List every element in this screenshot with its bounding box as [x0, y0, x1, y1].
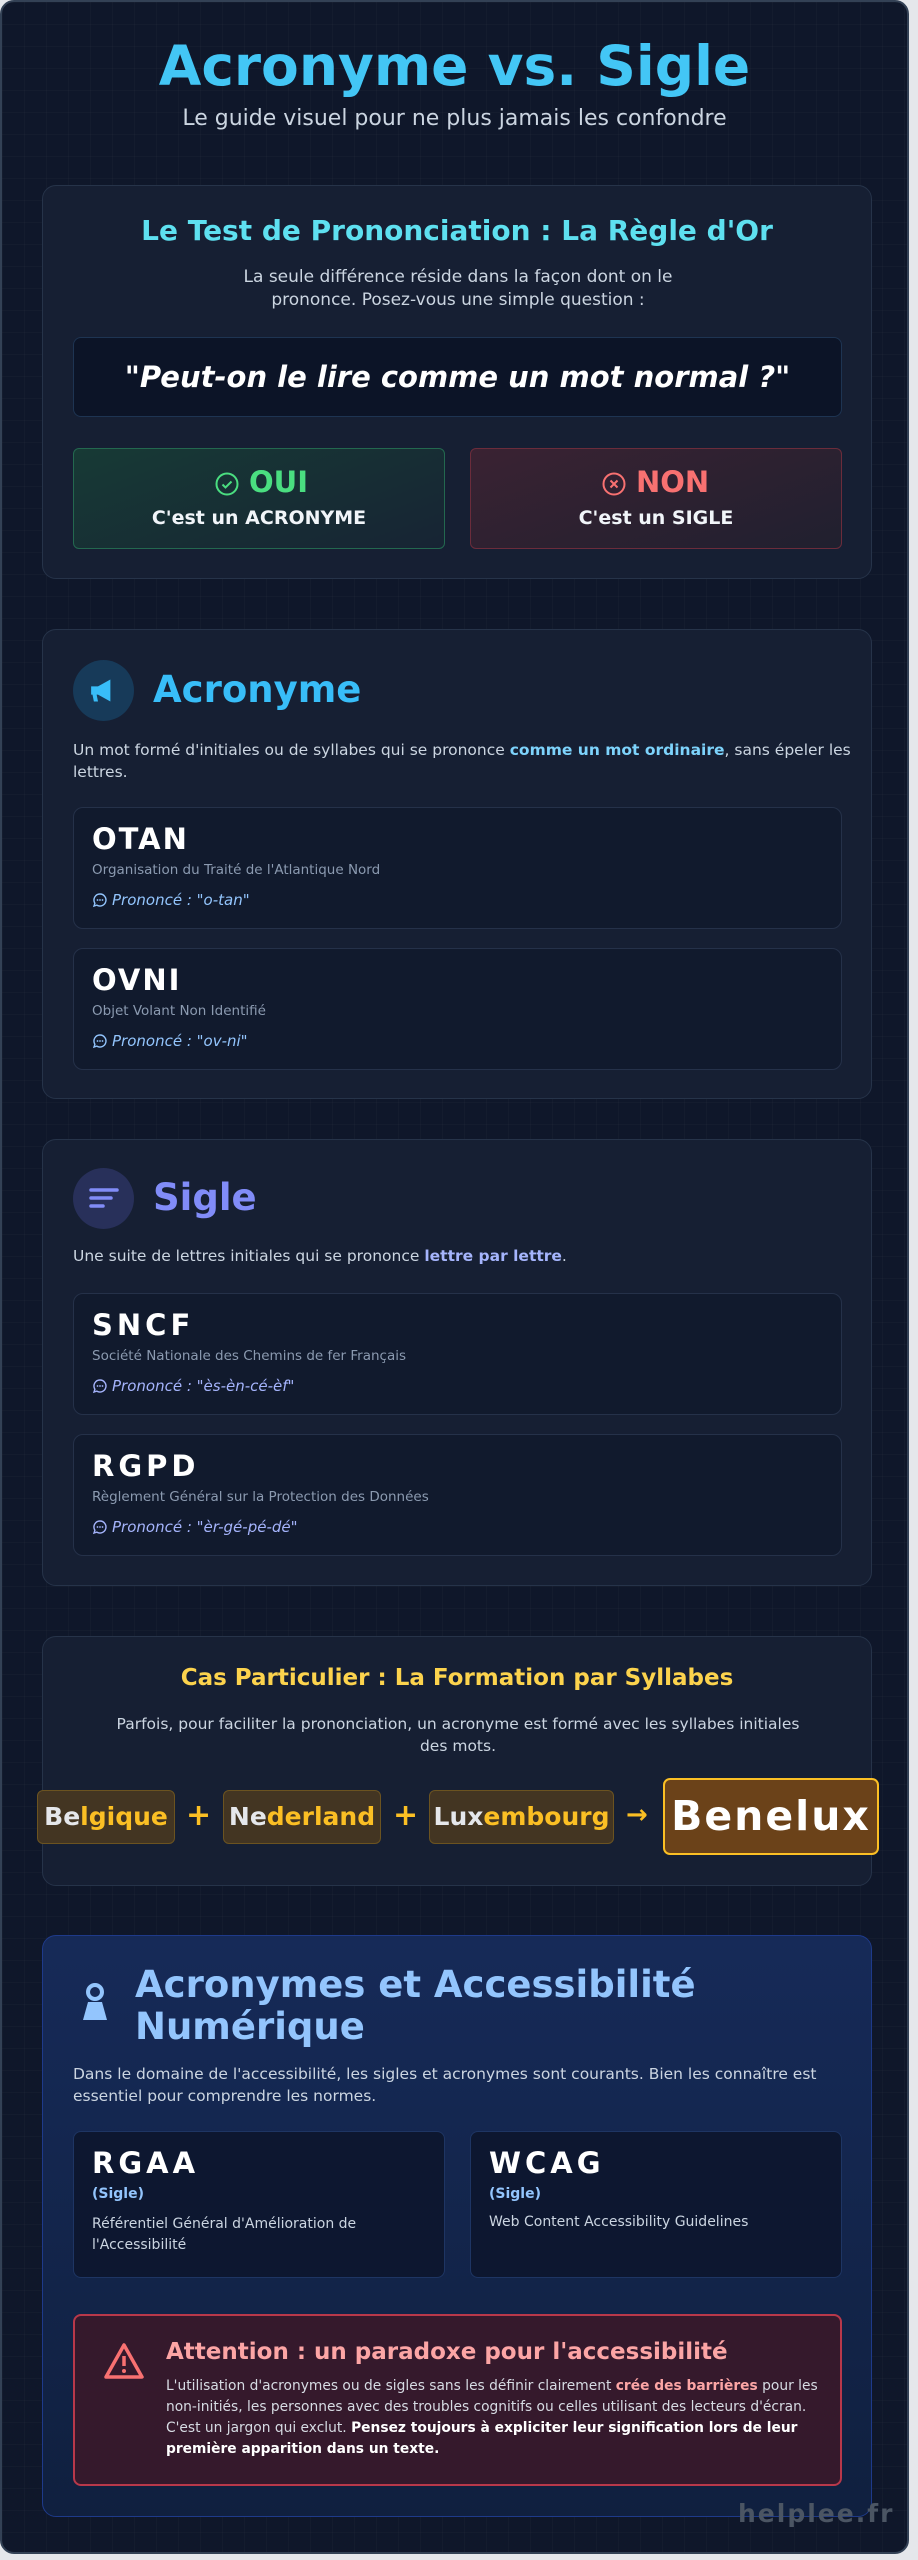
heading: Cas Particulier : La Formation par Syllabes	[181, 1665, 733, 1691]
card: RGAA	[73, 2131, 445, 2278]
card: RGAA: Référentiel Général d'Amélioration de l'Accessibilité	[92, 2216, 356, 2253]
icon: megaphone	[73, 660, 134, 721]
card: WCAG	[470, 2131, 842, 2278]
title: Acronyme vs. Sigle	[159, 34, 750, 98]
card: RGAA: (Sigle)	[92, 2186, 144, 2202]
card: OTAN	[73, 807, 842, 929]
icon: lines	[73, 1168, 134, 1229]
card: WCAG: WCAG	[489, 2146, 605, 2180]
formula: Benelux	[37, 1778, 879, 1855]
formula: Benelux: Belgique	[44, 1802, 168, 1831]
formula: Benelux: Benelux	[671, 1792, 871, 1840]
heading: Acronyme	[153, 668, 361, 711]
formula: Benelux: +	[186, 1798, 211, 1833]
panel: syllables	[42, 1636, 872, 1886]
card: WCAG: (Sigle)	[489, 2186, 541, 2202]
card: OTAN: OTAN	[92, 822, 189, 856]
box: NON: NON	[636, 465, 709, 499]
card: OTAN: Organisation du Traité de l'Atlantique Nord	[92, 862, 380, 878]
formula: Benelux: Nederland	[229, 1802, 375, 1831]
card: SNCF: SNCF	[92, 1308, 194, 1342]
watermark: helplee.fr	[738, 2499, 894, 2528]
callout: warning: L'utilisation d'acronymes ou de sigles sans les définir clairement crée des barrières pour les non-initiés, les personnes avec des troubles cognitifs ou celles utilisant des lecteurs d'écran. C'est un jargon qui exclut. Pensez toujours à expliciter leur signification lors de leur première apparition dans un texte.	[166, 2378, 818, 2457]
card: RGPD: Prononcé : "èr-gé-pé-dé"	[112, 1518, 298, 1536]
box: NON: C'est un SIGLE	[579, 507, 733, 529]
question box	[73, 337, 842, 417]
description: Une suite de lettres initiales qui se prononce lettre par lettre.	[73, 1247, 567, 1265]
box: OUI: OUI	[249, 465, 308, 499]
heading	[135, 1963, 696, 2048]
card: RGPD	[73, 1434, 842, 1556]
card: SNCF: Société Nationale des Chemins de fer Français	[92, 1348, 406, 1364]
heading: Sigle	[153, 1176, 257, 1219]
card: OVNI	[73, 948, 842, 1070]
card: OVNI: OVNI	[92, 963, 181, 997]
formula: Benelux: →	[626, 1800, 648, 1830]
box: OUI	[73, 448, 445, 549]
card: OVNI: Prononcé : "ov-ni"	[112, 1032, 248, 1050]
heading: Numérique	[135, 2005, 365, 2048]
card: OTAN: Prononcé : "o-tan"	[112, 891, 250, 909]
icon: keyhole person	[83, 1983, 107, 2020]
panel: pronunciation test	[42, 185, 872, 579]
heading: golden rule: Le Test de Prononciation : La Règle d'Or	[141, 214, 773, 247]
callout: warning	[73, 2314, 842, 2486]
card: WCAG: Web Content Accessibility Guidelines	[489, 2214, 748, 2230]
formula: Benelux: Luxembourg	[434, 1802, 609, 1831]
icon: cross	[602, 472, 626, 496]
text: Parfois, pour faciliter la prononciation, un acronyme est formé avec les syllabes initiales des mots.	[117, 1715, 799, 1755]
panel: Sigle	[42, 1139, 872, 1586]
card: RGPD: RGPD	[92, 1449, 199, 1483]
subtitle: Le guide visuel pour ne plus jamais les confondre	[182, 106, 727, 131]
card: RGPD: Règlement Général sur la Protection des Données	[92, 1489, 429, 1505]
box: NON	[470, 448, 842, 549]
box: OUI: C'est un ACRONYME	[152, 507, 366, 529]
heading: Acronymes et Accessibilité	[135, 1963, 696, 2006]
icon: warning triangle	[104, 2343, 144, 2379]
callout: warning: Attention : un paradoxe pour l'accessibilité	[166, 2339, 728, 2365]
description: Dans le domaine de l'accessibilité, les sigles et acronymes sont courants. Bien les connaître est essentiel pour comprendre les normes.	[73, 2065, 817, 2105]
text: intro: La seule différence réside dans la façon dont on le prononce. Posez-vous une simple question :	[244, 267, 672, 310]
card: OVNI: Objet Volant Non Identifié	[92, 1003, 266, 1019]
card: RGAA: RGAA	[92, 2146, 199, 2180]
panel: accessibility	[42, 1935, 872, 2517]
card: SNCF: Prononcé : "ès-èn-cé-èf"	[112, 1377, 294, 1395]
panel: Acronyme	[42, 629, 872, 1099]
icon: check	[216, 472, 238, 496]
card: SNCF	[73, 1293, 842, 1415]
question box: "Peut-on le lire comme un mot normal ?"	[125, 360, 790, 394]
description: Un mot formé d'initiales ou de syllabes qui se prononce comme un mot ordinaire, sans épeler les lettres.	[73, 741, 851, 781]
formula: Benelux: +	[393, 1798, 418, 1833]
